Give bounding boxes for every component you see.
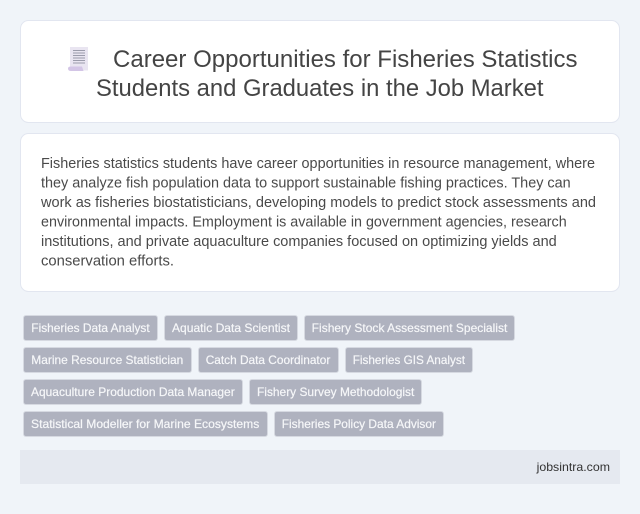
tag: Fisheries GIS Analyst: Fisheries GIS Analyst (353, 353, 466, 367)
description text: environmental impacts. Employment is available in government agencies, research (41, 214, 567, 230)
description text: they analyze fish population data to support sustainable fishing practices. They can (41, 176, 571, 192)
title: Students and Graduates in the Job Market (96, 75, 544, 102)
description text: conservation efforts. (41, 254, 174, 270)
tag: Marine Resource Statistician: Marine Resource Statistician (31, 353, 183, 367)
tag: Fisheries Data Analyst: Fisheries Data Analyst (31, 321, 150, 335)
tag: Fisheries Data Analyst (24, 316, 158, 340)
icon: document scroll (68, 47, 88, 71)
title: Career Opportunities for Fisheries Statistics (113, 46, 578, 73)
tag: Fishery Stock Assessment Specialist: Fishery Stock Assessment Specialist (312, 321, 508, 335)
footer bar (20, 450, 620, 484)
panel: job tags (24, 316, 514, 436)
tag: Fisheries Policy Data Advisor (274, 412, 444, 436)
description text: Fisheries statistics students have career opportunities in resource management, where (41, 156, 595, 172)
description text: work as fisheries biostatisticians, developing models to predict stock assessments and (40, 195, 596, 211)
tag: Catch Data Coordinator (198, 348, 338, 372)
tag: Marine Resource Statistician (24, 348, 192, 372)
tag: Aquatic Data Scientist: Aquatic Data Scientist (172, 321, 291, 335)
description text: institutions, and private aquaculture companies focused on optimizing yields and (41, 234, 557, 250)
tag: Catch Data Coordinator: Catch Data Coordinator (206, 353, 330, 367)
tag: Aquatic Data Scientist (164, 316, 298, 340)
tag: Statistical Modeller for Marine Ecosystems (24, 412, 268, 436)
tag: Fishery Survey Methodologist: Fishery Survey Methodologist (257, 385, 415, 399)
tag: Statistical Modeller for Marine Ecosystems: Statistical Modeller for Marine Ecosystems (31, 417, 259, 431)
tag: Fishery Stock Assessment Specialist (304, 316, 514, 340)
tag: Aquaculture Production Data Manager: Aquaculture Production Data Manager (31, 385, 235, 399)
tag: Aquaculture Production Data Manager (24, 380, 242, 404)
tag: Fishery Survey Methodologist (250, 380, 422, 404)
panel: title card (20, 20, 620, 122)
description text (40, 156, 596, 270)
title (96, 46, 578, 102)
tag: Fisheries Policy Data Advisor: Fisheries Policy Data Advisor (282, 417, 436, 431)
footer source text: jobsintra.com (536, 460, 610, 474)
tag: Fisheries GIS Analyst (346, 348, 472, 372)
panel: description card (20, 134, 620, 292)
